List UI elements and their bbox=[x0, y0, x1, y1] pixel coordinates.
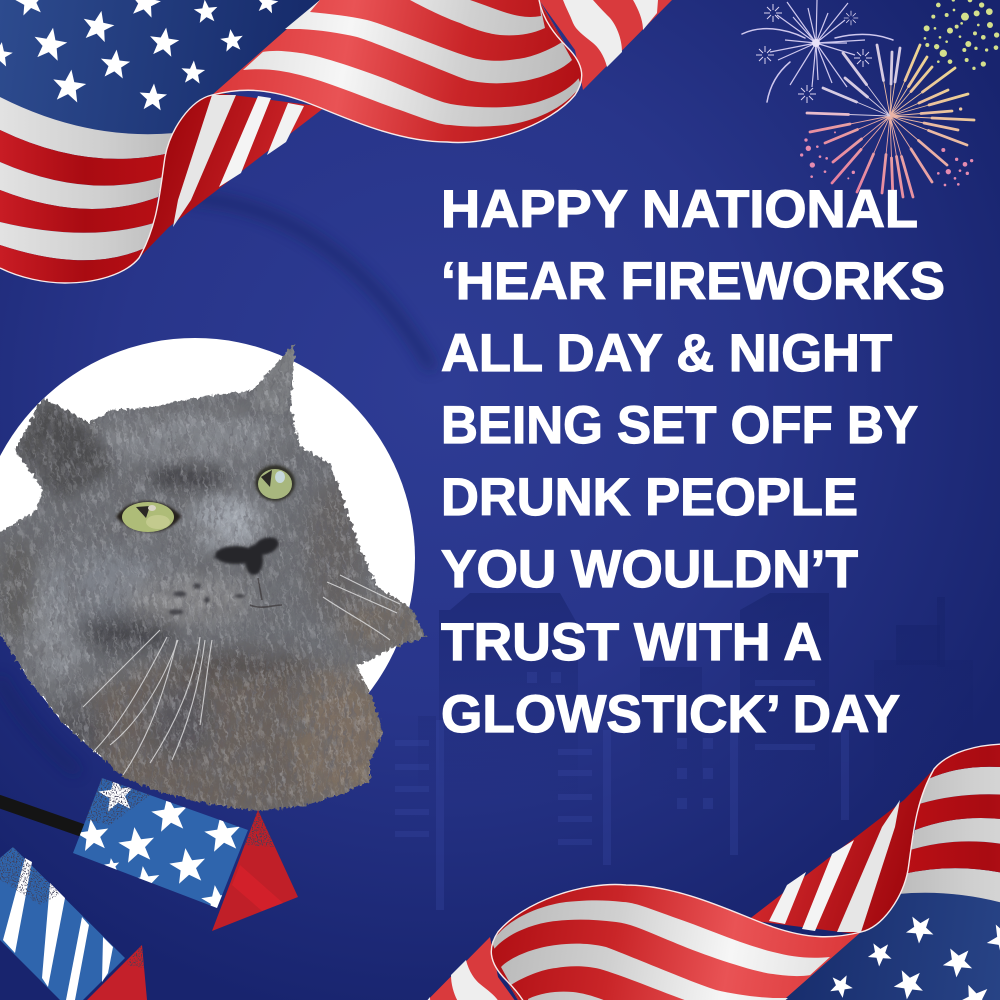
firework: pink dots bbox=[800, 107, 973, 186]
cat: nose bbox=[212, 534, 281, 575]
rocket cone bbox=[87, 945, 147, 1000]
rocket: stars bbox=[0, 774, 298, 931]
rocket speckle bbox=[85, 778, 150, 825]
flag: white fold edge line bbox=[0, 0, 582, 283]
rocket cone speckle bbox=[125, 945, 144, 968]
headline text: ALL DAY & NIGHT bbox=[441, 324, 892, 383]
flag: top-left ribbon bbox=[0, 0, 672, 283]
firework: green-yellow dots bbox=[924, 0, 999, 70]
cat: soft dark mottling bbox=[28, 382, 376, 788]
headline text: HAPPY NATIONAL bbox=[441, 180, 918, 239]
cat: mouth bbox=[250, 578, 282, 607]
city: dark building silhouettes bbox=[418, 593, 973, 806]
cat photo illustration bbox=[0, 344, 428, 812]
rocket stick bbox=[0, 801, 84, 831]
rocket speckle bbox=[0, 847, 60, 905]
headline text: YOU WOULDN’T bbox=[441, 540, 858, 599]
flag: navy canton with stars bbox=[0, 0, 322, 134]
cat: right eye bbox=[255, 465, 295, 501]
rocket cone highlight bbox=[232, 865, 283, 911]
headline text: GLOWSTICK’ DAY bbox=[441, 685, 900, 744]
cat: left eye bbox=[116, 501, 181, 532]
headline text: BEING SET OFF BY bbox=[441, 396, 918, 455]
cat: left ear bbox=[15, 398, 115, 500]
rocket body bbox=[0, 847, 125, 1000]
background: soft circular shadows bbox=[0, 198, 430, 770]
headline text: DRUNK PEOPLE bbox=[441, 468, 858, 527]
rocket stripes bbox=[3, 858, 113, 1000]
cat: dark fur streaks bbox=[0, 346, 409, 798]
background: faint city skyline bbox=[395, 593, 973, 910]
cat: dark brow bbox=[148, 465, 228, 491]
headline text: ‘HEAR FIREWORKS bbox=[441, 252, 945, 311]
rocket body bbox=[73, 778, 248, 908]
cat: right ear bbox=[250, 343, 295, 415]
rocket: lower-left striped bbox=[0, 847, 147, 1000]
headline text bbox=[441, 180, 945, 744]
cat: fur body bbox=[0, 344, 428, 812]
fireworks bbox=[742, 0, 999, 200]
rocket cone bbox=[212, 810, 298, 931]
flag: main waving ribbon bbox=[212, 0, 582, 142]
white circle behind cat bbox=[0, 338, 415, 778]
rocket cone speckle bbox=[245, 810, 275, 847]
flag: folded underside stripes bbox=[139, 93, 325, 258]
cat: whiskers bbox=[83, 575, 400, 775]
cat: muzzle spots bbox=[169, 583, 245, 615]
flag: bottom-right ribbon bbox=[401, 744, 1000, 1000]
flag: left stripes bbox=[0, 97, 175, 283]
city: lighter windows and edges bbox=[395, 672, 849, 910]
rocket stars bbox=[80, 782, 240, 908]
firework: yellow-pink burst bbox=[807, 45, 974, 200]
cat: light fur streaks bbox=[0, 344, 423, 811]
flag: top-right small fold bbox=[539, 0, 672, 90]
headline text: TRUST WITH A bbox=[441, 613, 822, 672]
firework: lilac burst bbox=[742, 0, 893, 103]
